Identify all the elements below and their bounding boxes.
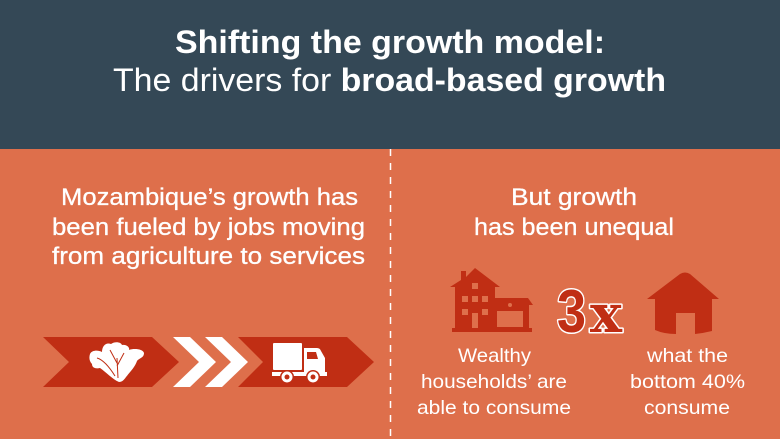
multiplier: 3x: 3: [557, 278, 586, 345]
panel: orange background: [0, 149, 780, 439]
text block: wealthy households: able to consume: [417, 397, 571, 419]
multiplier: 3x: [557, 278, 623, 345]
arrow: white chevron 2: [205, 337, 248, 387]
text block: left heading: Mozambique’s growth has: [61, 184, 358, 211]
text block: bottom 40%: what the: [646, 345, 728, 367]
icon: lettuce: [89, 342, 144, 382]
text block: right heading: has been unequal: [474, 214, 674, 241]
arrow: services chevron: [238, 337, 374, 387]
title line 1: Shifting the growth model:: [175, 24, 605, 60]
arrow: agriculture chevron: [43, 337, 179, 387]
text block: left heading: been fueled by jobs moving: [52, 214, 365, 241]
text block: left heading: [52, 184, 365, 270]
text block: wealthy households: [417, 345, 571, 419]
text block: right heading: [474, 184, 674, 241]
text block: wealthy households: Wealthy: [458, 345, 531, 367]
title line 2: The drivers for broad-based growth: [113, 62, 666, 98]
text block: right heading: But growth: [511, 184, 637, 211]
text block: bottom 40%: consume: [644, 397, 730, 419]
arrow: white chevron 1: [173, 337, 216, 387]
text block: left heading: from agriculture to services: [52, 243, 365, 270]
text block: bottom 40%: bottom 40%: [630, 371, 745, 393]
icon: delivery truck: [272, 343, 327, 384]
text block: bottom 40%: [630, 345, 745, 419]
text block: wealthy households: households’ are: [421, 371, 567, 393]
icon: small house: [647, 272, 719, 334]
icon: large wealthy house: [450, 268, 533, 332]
multiplier: 3x: x: [590, 284, 623, 345]
panel: title header: [0, 0, 780, 149]
